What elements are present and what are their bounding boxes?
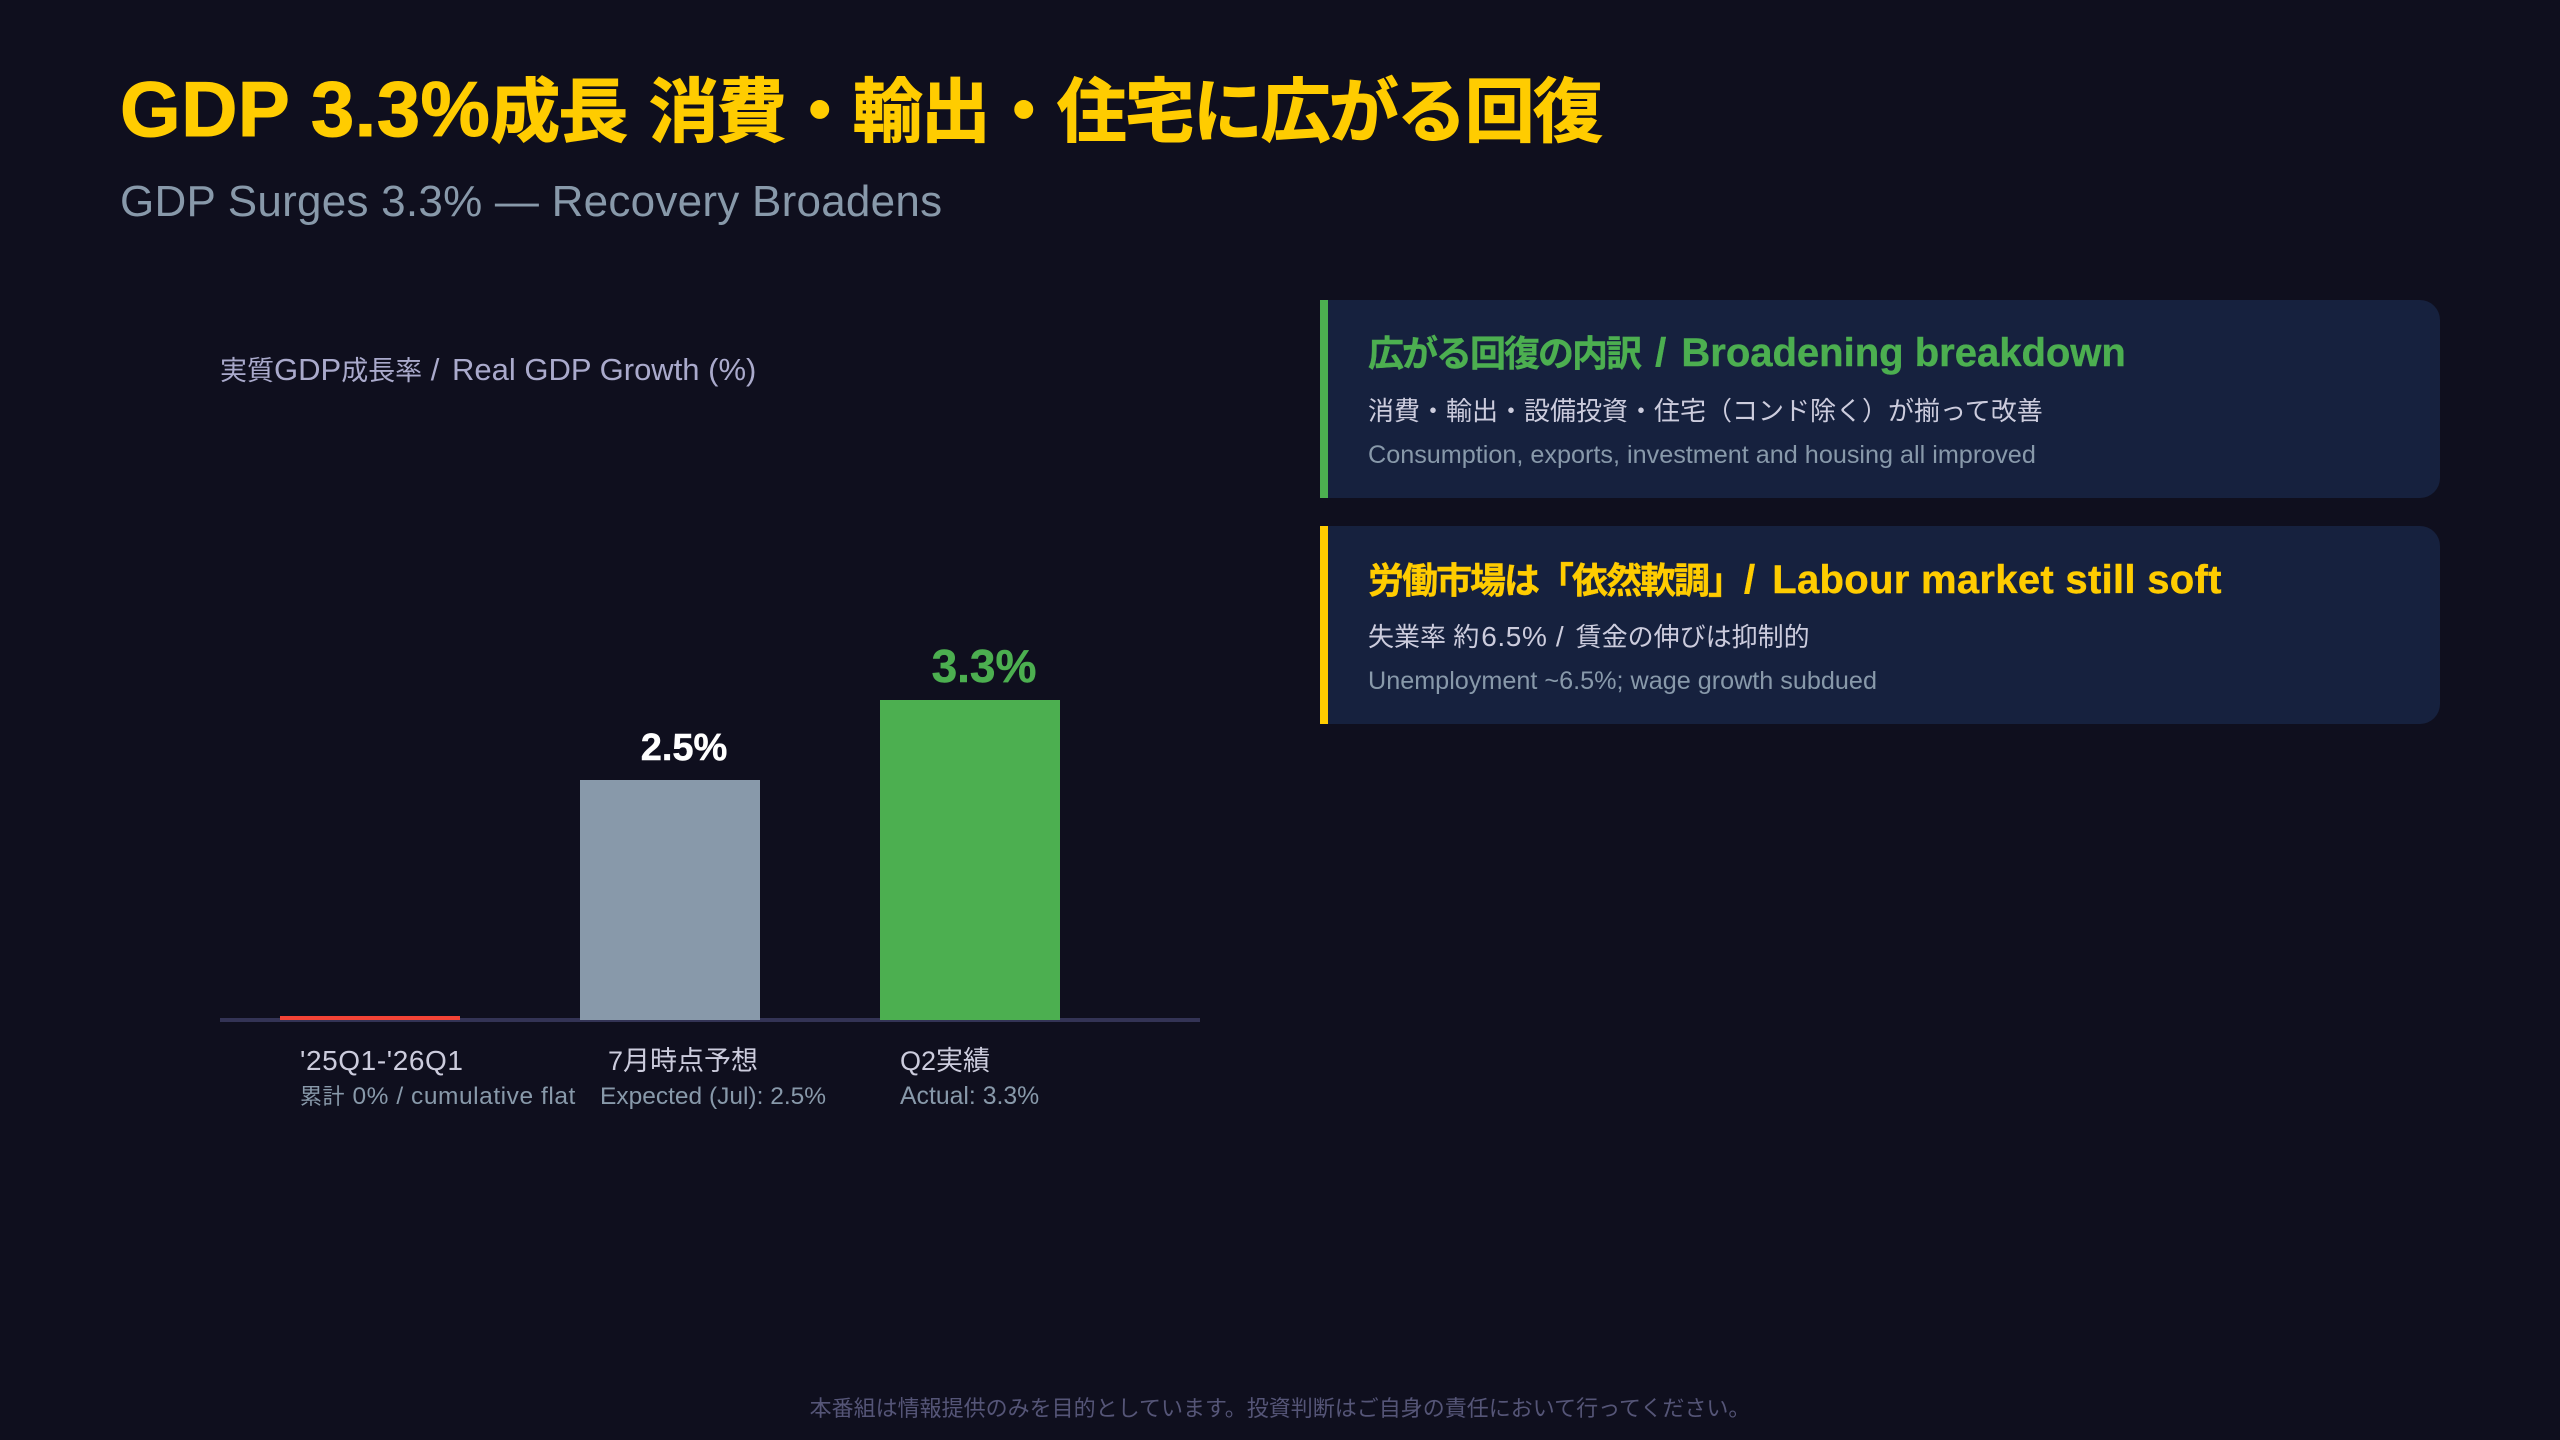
axis baseline bbox=[220, 1018, 1200, 1022]
axis label sub: expected 2.5%: Expected (Jul): 2.5% bbox=[600, 1083, 826, 1110]
panel: broadening breakdown bbox=[1320, 300, 2440, 498]
axis label main: Q2 actual: Q2実績 bbox=[900, 1046, 990, 1076]
axis label main: 25Q1-26Q1: '25Q1-'26Q1 bbox=[300, 1045, 464, 1076]
card body English: Unemployment ~6.5%; wage growth subdued bbox=[1368, 667, 1877, 695]
card body English: Consumption, exports, investment and housing all improved bbox=[1368, 441, 2036, 469]
axis label: cumulative bbox=[300, 1045, 576, 1110]
value label: 2.5%: 2.5% bbox=[641, 727, 727, 769]
bar: actual 3.3% bbox=[880, 700, 1060, 1020]
footer disclaimer: 本番組は情報提供のみを目的としています。投資判断はご自身の責任において行ってください。 bbox=[810, 1396, 1750, 1421]
card body Japanese: 失業率 約6.5% / 賃金の伸びは抑制的 bbox=[1368, 621, 1810, 652]
axis label: expected bbox=[600, 1046, 826, 1110]
card accent bar: yellow bbox=[1320, 526, 1328, 724]
panel: labour market bbox=[1320, 526, 2440, 724]
axis label sub: cumulative flat: 累計 0% / cumulative flat bbox=[300, 1083, 576, 1110]
card accent bar: green bbox=[1320, 300, 1328, 498]
bar: cumulative flat bbox=[280, 1016, 460, 1020]
bar: expected 2.5% bbox=[580, 780, 760, 1020]
card heading: 労働市場は「依然軟調」/ Labour market still soft bbox=[1368, 558, 2222, 602]
chart title: 実質GDP成長率 / Real GDP Growth (%) bbox=[220, 352, 756, 387]
axis label: actual bbox=[900, 1046, 1039, 1110]
axis label sub: actual 3.3%: Actual: 3.3% bbox=[900, 1083, 1039, 1110]
card body Japanese: 消費・輸出・設備投資・住宅（コンド除く）が揃って改善 bbox=[1368, 396, 2043, 426]
card heading: 広がる回復の内訳 / Broadening breakdown bbox=[1368, 331, 2126, 375]
title: GDP 3.3%成長 消費・輸出・住宅に広がる回復 bbox=[120, 65, 1601, 153]
axis label main: July forecast: 7月時点予想 bbox=[608, 1046, 758, 1076]
value label: 3.3%: 3.3% bbox=[932, 640, 1036, 692]
subtitle: GDP Surges 3.3% — Recovery Broadens bbox=[120, 177, 942, 226]
panel: GDP growth bar chart bbox=[220, 352, 1200, 1110]
